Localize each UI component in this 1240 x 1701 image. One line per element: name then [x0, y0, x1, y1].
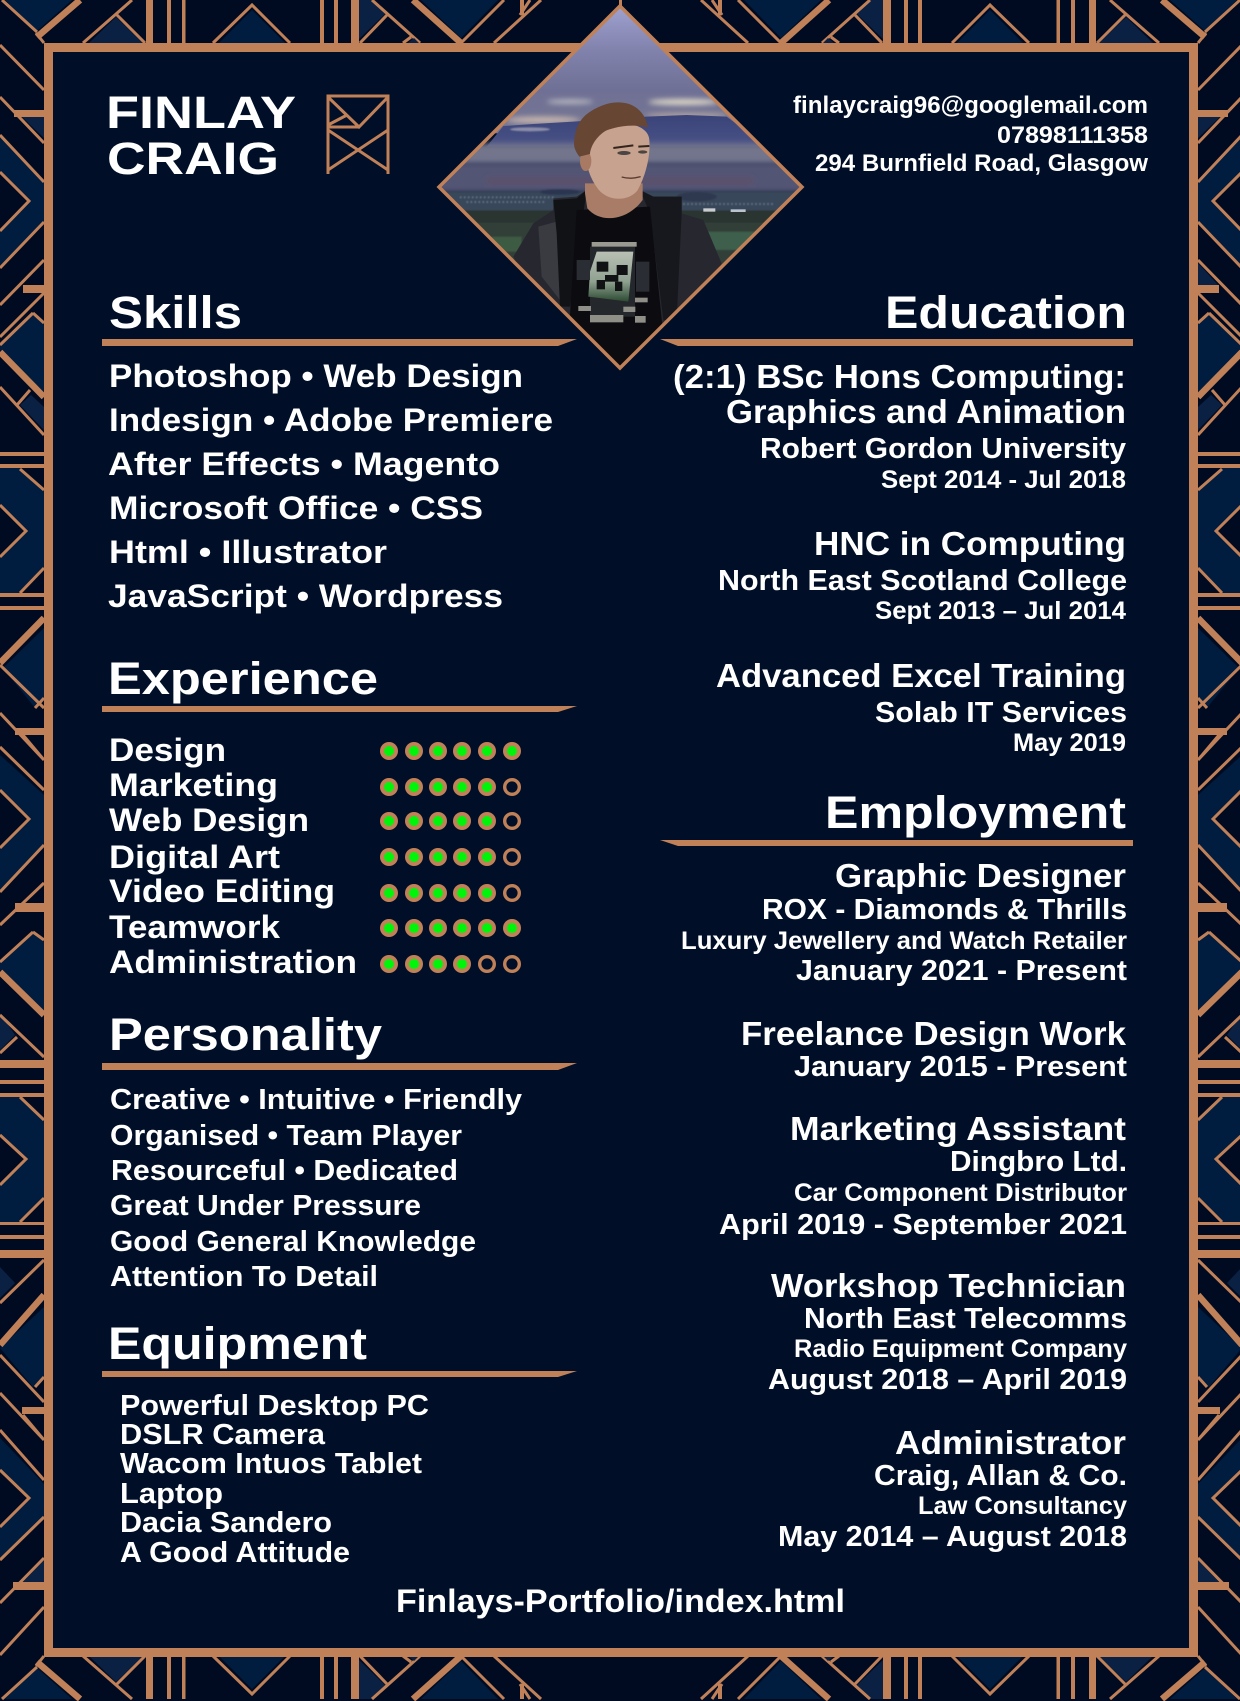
- experience labels: Administration: [109, 944, 357, 980]
- equipment list: Laptop: [120, 1478, 223, 1510]
- t-shirt: [567, 207, 667, 367]
- equipment list: DSLR Camera: [120, 1419, 326, 1451]
- job: graphic designer: January 2021 - Present: [796, 955, 1127, 987]
- heading: employment: Employment: [825, 787, 1126, 838]
- education entry: BSc: (2:1) BSc Hons Computing:: [673, 358, 1126, 395]
- art deco border: bottom band: [2, 1656, 541, 1699]
- education entry: BSc: Graphics and Animation: [726, 393, 1126, 430]
- skills list: Microsoft Office • CSS: [109, 490, 483, 526]
- job: freelance: [741, 1015, 1127, 1083]
- education entry: HNC: Sept 2013 – Jul 2014: [875, 597, 1126, 625]
- job: workshop technician: Radio Equipment Company: [794, 1335, 1127, 1363]
- icon: envelope: [328, 96, 388, 174]
- art deco border: right band extra tile: [1198, 263, 1218, 285]
- personality list: Great Under Pressure: [110, 1190, 421, 1222]
- equipment list: Powerful Desktop PC: [120, 1390, 429, 1422]
- personality list: Organised • Team Player: [110, 1120, 462, 1152]
- education entry: Excel: Advanced Excel Training: [716, 657, 1126, 694]
- personality list: Attention To Detail: [110, 1261, 378, 1293]
- footer portfolio link: Finlays-Portfolio/index.html: [396, 1583, 845, 1619]
- education entry: Excel: Solab IT Services: [875, 697, 1127, 729]
- name title: [106, 87, 296, 184]
- personality list: Creative • Intuitive • Friendly: [110, 1084, 522, 1116]
- heading rule: [102, 1063, 577, 1070]
- job: freelance: January 2015 - Present: [794, 1051, 1127, 1083]
- personality list: Good General Knowledge: [110, 1226, 476, 1258]
- heading rule: [102, 339, 577, 346]
- experience labels: Web Design: [109, 802, 309, 838]
- education entry: Excel: [716, 657, 1127, 757]
- panel: employment: [660, 787, 1133, 1553]
- job: graphic designer: [681, 857, 1127, 987]
- name title: FINLAY: [106, 87, 296, 138]
- panel: skills: [102, 287, 577, 614]
- art deco border: left band: [0, 45, 44, 1655]
- experience labels: Marketing: [109, 767, 278, 803]
- job: marketing assistant: Dingbro Ltd.: [950, 1146, 1127, 1178]
- name title: CRAIG: [107, 133, 279, 184]
- education entry: HNC: North East Scotland College: [718, 565, 1127, 597]
- heading rule: [102, 706, 577, 712]
- heading: equipment: Equipment: [108, 1318, 367, 1369]
- experience labels: Teamwork: [109, 909, 280, 945]
- skills list: Photoshop • Web Design: [109, 358, 523, 394]
- job: workshop technician: [768, 1267, 1127, 1396]
- job: graphic designer: Luxury Jewellery and Watch Retailer: [681, 927, 1127, 955]
- equipment list: Wacom Intuos Tablet: [120, 1448, 422, 1480]
- heading: personality: Personality: [109, 1009, 382, 1060]
- neck: [585, 183, 643, 218]
- diamond tip tick: [619, 0, 622, 8]
- rating dots: [380, 742, 521, 973]
- job: workshop technician: August 2018 – April 2019: [768, 1364, 1127, 1396]
- skills list: Html • Illustrator: [109, 534, 387, 570]
- job: workshop technician: North East Telecomms: [804, 1303, 1127, 1335]
- experience labels: Digital Art: [109, 839, 280, 875]
- education entry: BSc: Sept 2014 - Jul 2018: [881, 466, 1126, 494]
- job: marketing assistant: April 2019 - September 2021: [719, 1209, 1127, 1241]
- skills list: Indesign • Adobe Premiere: [109, 402, 553, 438]
- job: graphic designer: ROX - Diamonds & Thrills: [762, 894, 1127, 926]
- heading: skills: Skills: [109, 287, 242, 338]
- personality list: [110, 1084, 522, 1293]
- job: workshop technician: Workshop Technician: [771, 1267, 1126, 1304]
- face: [586, 122, 650, 199]
- heading rule: [660, 840, 1133, 846]
- contact details: [793, 92, 1148, 177]
- heading: education: Education: [885, 287, 1127, 338]
- heading rule: [102, 1371, 577, 1377]
- art deco border: bottom band mirrored: [701, 1656, 1240, 1699]
- education entry: HNC: HNC in Computing: [814, 525, 1126, 562]
- panel: equipment: [102, 1318, 577, 1569]
- experience labels: Design: [109, 732, 226, 768]
- equipment list: [120, 1390, 429, 1569]
- education entry: Excel: May 2019: [1013, 729, 1126, 757]
- panel: experience: [102, 653, 577, 980]
- person jacket: [514, 191, 722, 324]
- equipment list: A Good Attitude: [120, 1537, 350, 1569]
- contact details: 07898111358: [997, 122, 1148, 149]
- job: marketing assistant: Marketing Assistant: [790, 1110, 1126, 1147]
- experience labels: [109, 732, 357, 980]
- job: administrator: Administrator: [895, 1424, 1126, 1461]
- job: administrator: [778, 1424, 1127, 1553]
- contact details: finlaycraig96@googlemail.com: [793, 92, 1148, 119]
- panel: personality: [102, 1009, 577, 1293]
- job: marketing assistant: [719, 1110, 1127, 1241]
- personality list: Resourceful • Dedicated: [111, 1155, 458, 1187]
- experience labels: Video Editing: [109, 873, 335, 909]
- art deco border: top band: [2, 0, 541, 43]
- job: administrator: Craig, Allan & Co.: [874, 1460, 1127, 1492]
- heading rule: [660, 339, 1133, 346]
- art deco border: top band mirrored: [701, 0, 1240, 43]
- education entry: BSc: [673, 358, 1126, 494]
- contact details: 294 Burnfield Road, Glasgow: [815, 150, 1148, 177]
- job: administrator: May 2014 – August 2018: [778, 1521, 1127, 1553]
- skills list: JavaScript • Wordpress: [108, 578, 503, 614]
- portrait photo in diamond: [420, 0, 820, 368]
- panel: education: [660, 287, 1133, 757]
- art deco border: right band: [1198, 45, 1240, 1655]
- job: graphic designer: Graphic Designer: [835, 857, 1126, 894]
- skills list: After Effects • Magento: [108, 446, 500, 482]
- education entry: BSc: Robert Gordon University: [760, 433, 1126, 465]
- job: administrator: Law Consultancy: [918, 1492, 1127, 1520]
- job: marketing assistant: Car Component Distributor: [794, 1179, 1127, 1207]
- education entry: HNC: [718, 525, 1127, 625]
- job: freelance: Freelance Design Work: [741, 1015, 1127, 1052]
- equipment list: Dacia Sandero: [120, 1507, 332, 1539]
- skills list: [108, 358, 553, 614]
- heading: experience: Experience: [108, 653, 378, 704]
- creeper print: [590, 247, 635, 317]
